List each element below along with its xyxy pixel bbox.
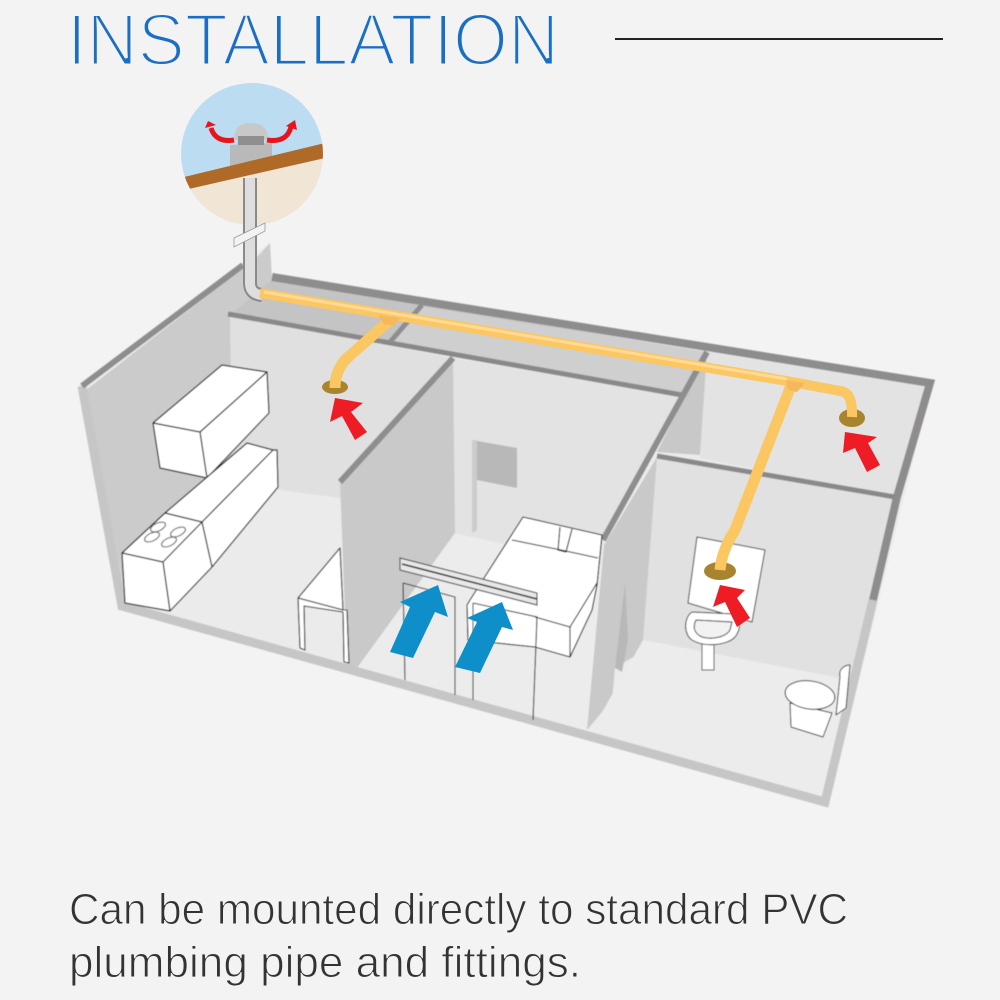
- title: INSTALLATION: [67, 0, 559, 81]
- caption: [69, 885, 848, 987]
- left wall: [86, 243, 272, 600]
- yellow duct: [260, 292, 865, 580]
- caption: Can be mounted directly to standard PVC: [69, 885, 848, 934]
- right rear room: [700, 352, 925, 497]
- roof circle: [180, 83, 325, 225]
- outer walls top edges: [82, 265, 930, 802]
- lower kitchen counter: [122, 443, 278, 611]
- upper kitchen cabinet: [153, 365, 269, 478]
- ceiling rings: [322, 380, 348, 394]
- wardrobe: [400, 558, 537, 720]
- bedroom floor: [357, 533, 603, 732]
- bed: [467, 517, 602, 657]
- kitchen back wall: [230, 315, 453, 498]
- red arrow: right room: [843, 432, 880, 472]
- toilet: [783, 665, 850, 737]
- window recess: [472, 440, 517, 488]
- pipe break: [234, 223, 265, 247]
- kitchen floor: [120, 482, 352, 670]
- grey pipe: [250, 178, 262, 295]
- kitchen bedroom partition face: [340, 358, 455, 668]
- vent pipe with roof detail: [180, 83, 325, 295]
- sink: [686, 612, 740, 670]
- red arrow: bathroom: [713, 585, 750, 627]
- dining table: [298, 548, 349, 663]
- title rule: [615, 38, 943, 40]
- bathroom back wall: [643, 457, 895, 680]
- vent cap: [234, 123, 268, 140]
- bathroom floor: [592, 640, 850, 797]
- bedroom bathroom partition face: [587, 457, 657, 730]
- red arrow: kitchen: [330, 398, 367, 440]
- corridor rear room: [230, 280, 707, 395]
- caption: plumbing pipe and fittings.: [69, 938, 581, 987]
- tee joints: [378, 315, 400, 326]
- red airflow arrows: [211, 127, 291, 140]
- blue arrow: left: [390, 585, 448, 658]
- blue arrow: right: [455, 602, 513, 673]
- floor plan illustration: [80, 243, 933, 807]
- bedroom back wall: [453, 358, 682, 570]
- bathroom wall panel: [688, 537, 765, 622]
- building base: [80, 243, 933, 807]
- roof beam: [180, 143, 325, 191]
- vent box: [230, 143, 272, 166]
- main duct run: [260, 293, 852, 417]
